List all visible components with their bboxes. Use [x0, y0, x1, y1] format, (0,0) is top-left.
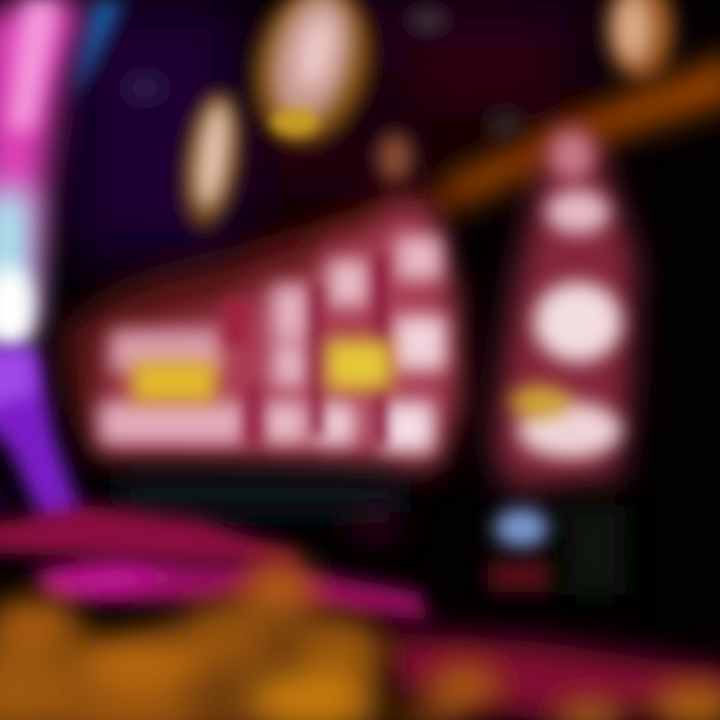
orange ceiling streak	[250, 50, 720, 280]
dark machine bases	[120, 475, 400, 542]
right machine base	[488, 505, 625, 595]
neon light column	[0, 0, 124, 528]
small oval light	[175, 87, 249, 233]
golden foreground blobs	[0, 560, 720, 720]
small ceiling lights	[125, 8, 523, 184]
slot machine row	[62, 195, 460, 470]
right slot machine	[492, 130, 636, 488]
gold foreground base	[0, 590, 380, 720]
magenta carpet	[0, 505, 720, 720]
dark purple ceiling	[70, 0, 590, 260]
machine screens	[100, 236, 446, 452]
top right lamp	[606, 0, 674, 80]
dark red dividers	[224, 255, 387, 445]
yellow jackpot panels	[132, 340, 392, 402]
large oval ceiling light	[236, 0, 388, 159]
